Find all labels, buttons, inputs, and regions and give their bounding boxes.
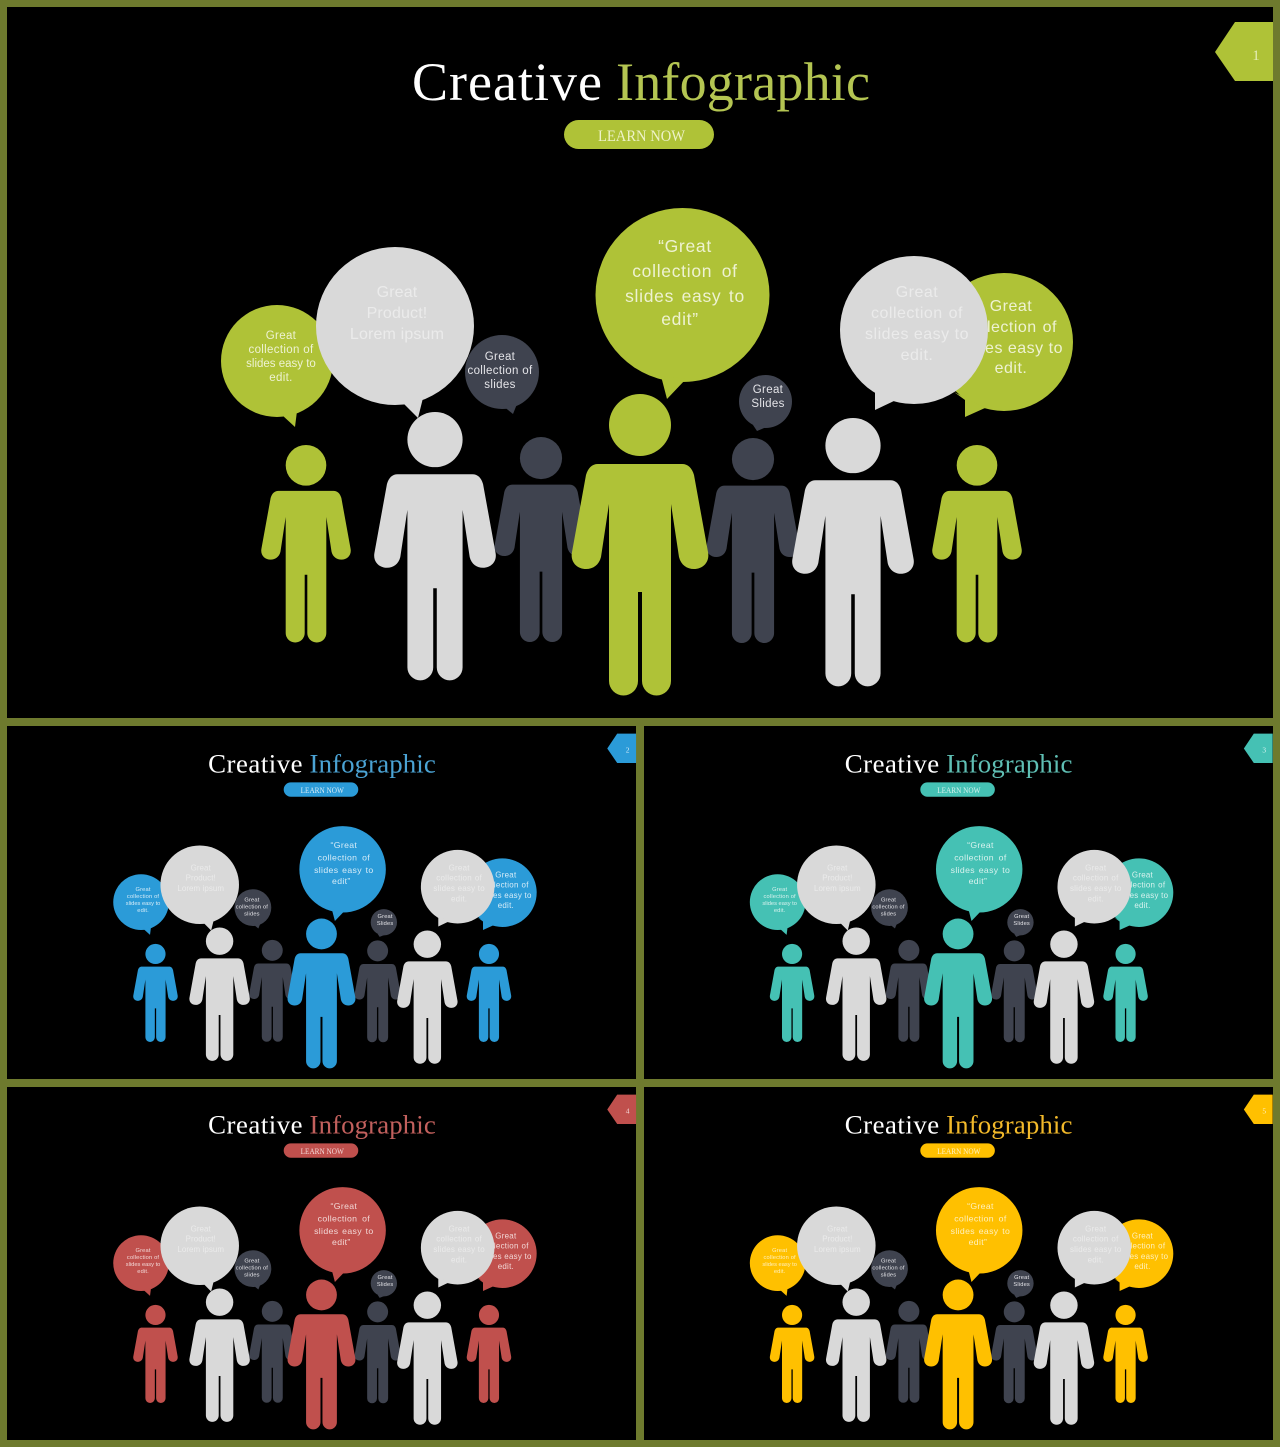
panel: blue slide	[7, 726, 636, 1079]
speech bubble: white left: Lorem ipsum	[177, 1245, 224, 1254]
speech bubble: blue right: slides easy to	[480, 891, 532, 900]
speech bubble: teal left: edit.	[774, 908, 786, 914]
button: learn now	[564, 120, 714, 149]
page tag 1	[1215, 22, 1273, 81]
person: white right	[397, 930, 458, 1064]
speech bubble: green left: edit.	[269, 372, 293, 384]
title: Infographic	[310, 748, 436, 778]
speech bubble: yellow right	[1105, 1219, 1173, 1291]
speech bubble: green left: Great	[266, 330, 297, 342]
speech bubble: white right: collection of	[436, 1235, 483, 1244]
speech bubble: green right: Great	[990, 298, 1032, 315]
speech bubble: dark left	[871, 1250, 908, 1289]
speech bubble: red right: Great	[495, 1231, 517, 1240]
speech bubble: dark left: collection of	[872, 1266, 905, 1272]
speech bubble: green right: edit.	[995, 360, 1027, 377]
speech bubble: dark small: Great	[1014, 914, 1029, 920]
speech bubble: dark small	[739, 375, 792, 431]
speech bubble: yellow centre	[936, 1187, 1022, 1282]
page tag 3	[1244, 734, 1273, 763]
speech bubble: white right: slides easy to	[1070, 884, 1122, 893]
speech bubble: white left	[160, 845, 239, 930]
panel: yellow slide	[644, 1087, 1273, 1440]
speech bubble: blue right: edit.	[498, 901, 514, 910]
speech bubble: dark left: Great	[881, 898, 896, 904]
page tag 2: 2	[626, 746, 630, 755]
speech bubble: teal right	[1105, 858, 1173, 930]
person: small green right	[932, 445, 1022, 642]
person: dark left	[249, 940, 295, 1042]
speech bubble: white left	[160, 1206, 239, 1291]
button: learn now: LEARN NOW	[598, 128, 686, 145]
speech bubble: yellow right: Great	[1132, 1231, 1154, 1240]
speech bubble: dark small	[1007, 909, 1034, 937]
speech bubble: dark small: Great	[378, 1275, 393, 1281]
speech bubble: white right: collection of	[436, 874, 483, 883]
speech bubble: blue left: edit.	[137, 908, 149, 914]
speech bubble: teal right: slides easy to	[1117, 891, 1169, 900]
speech bubble: white right	[1057, 1211, 1131, 1287]
speech bubble: dark small: Slides	[1013, 921, 1030, 927]
person: white left	[374, 412, 496, 680]
person: small teal right	[1103, 944, 1148, 1042]
person: small teal left	[770, 944, 814, 1042]
speech bubble: red centre: “Great	[330, 1201, 357, 1211]
person: small blue left	[133, 944, 178, 1042]
title	[412, 52, 870, 112]
speech bubble: yellow centre: collection of	[954, 1213, 1007, 1223]
speech bubble: dark small	[1007, 1270, 1034, 1298]
speech bubble: dark small: Great	[753, 384, 784, 396]
speech bubble: white right	[421, 1211, 494, 1287]
speech bubble: white right: edit.	[901, 347, 933, 364]
speech bubble: white left: Great	[191, 863, 212, 872]
speech bubble: white left: Great	[827, 1224, 848, 1233]
speech bubble: green centre: “Great	[658, 236, 712, 256]
speech bubble: dark left: slides	[244, 912, 260, 918]
speech bubble: white right: Great	[1085, 863, 1107, 872]
title: Creative	[845, 748, 939, 778]
person: small red right	[467, 1305, 511, 1403]
speech bubble: white left	[316, 247, 474, 418]
person: small red left	[133, 1305, 178, 1403]
speech bubble: blue left: collection of	[127, 894, 159, 900]
speech bubble: blue centre: slides easy to	[314, 865, 374, 875]
speech bubble: dark left: collection of	[467, 365, 533, 377]
title	[845, 748, 1072, 778]
speech bubble: blue centre: “Great	[330, 840, 357, 850]
person: white left	[826, 927, 886, 1061]
speech bubble: white right: slides easy to	[433, 1245, 485, 1254]
person: dark right	[707, 438, 799, 643]
speech bubble: white left: Great	[827, 863, 848, 872]
speech bubble: white left: Lorem ipsum	[350, 326, 444, 343]
person: dark right	[355, 940, 401, 1042]
speech bubble: white right: edit.	[451, 1256, 467, 1265]
speech bubble: white left: Product!	[186, 1235, 216, 1244]
speech bubble: white right: slides easy to	[1070, 1245, 1122, 1254]
speech bubble: green centre	[596, 208, 770, 399]
person: small yellow right	[1103, 1305, 1148, 1403]
speech bubble: green left: collection of	[248, 344, 314, 356]
speech bubble: yellow centre: “Great	[967, 1201, 994, 1211]
speech bubble: dark left: Great	[485, 351, 516, 363]
speech bubble: red left	[113, 1235, 169, 1296]
speech bubble: red centre: slides easy to	[314, 1226, 374, 1236]
person: white left	[189, 927, 250, 1061]
speech bubble: red right: edit.	[498, 1262, 514, 1271]
speech bubble: dark left	[235, 889, 271, 928]
page tag 5: 5	[1262, 1107, 1266, 1116]
speech bubble: red right: slides easy to	[480, 1252, 532, 1261]
speech bubble: teal right: edit.	[1134, 901, 1151, 910]
speech bubble: white right: collection of	[1073, 1235, 1119, 1244]
speech bubble: blue centre: collection of	[318, 852, 370, 862]
title: Creative	[412, 52, 602, 112]
speech bubble: teal right: Great	[1132, 870, 1154, 879]
speech bubble: dark left	[871, 889, 908, 928]
speech bubble: blue left: Great	[136, 887, 151, 893]
title	[208, 1109, 436, 1139]
speech bubble: green centre: slides easy to	[625, 286, 745, 306]
speech bubble: white right: slides easy to	[433, 884, 485, 893]
person: small green left	[261, 445, 351, 642]
speech bubble: dark left: slides	[244, 1273, 260, 1279]
speech bubble: white right: Great	[449, 1224, 470, 1233]
title: Infographic	[946, 748, 1072, 778]
speech bubble: blue centre	[299, 826, 386, 921]
person: dark right	[991, 940, 1037, 1042]
person: dark left	[249, 1301, 295, 1403]
button: learn now	[284, 782, 358, 797]
speech bubble: dark small	[371, 909, 397, 937]
button: learn now: LEARN NOW	[937, 786, 981, 795]
speech bubble: red left: edit.	[137, 1269, 149, 1275]
speech bubble: green left: slides easy to	[246, 358, 316, 370]
title: Creative	[208, 748, 303, 778]
speech bubble: blue right: Great	[495, 870, 517, 879]
speech bubble: dark left: collection of	[872, 905, 905, 911]
speech bubble: yellow left: slides easy to	[762, 1262, 797, 1268]
speech bubble: red left: collection of	[127, 1255, 159, 1261]
page tag 2	[607, 734, 636, 763]
speech bubble: white right: Great	[1085, 1224, 1107, 1233]
person: dark left	[495, 437, 587, 642]
speech bubble: white right: collection of	[871, 305, 963, 322]
title	[845, 1109, 1072, 1139]
speech bubble: white left	[797, 845, 876, 930]
speech bubble: dark small: Slides	[377, 921, 393, 927]
person: white right	[1034, 930, 1094, 1064]
person: large yellow centre	[924, 1280, 992, 1429]
speech bubble: teal right: collection of	[1120, 881, 1166, 890]
speech bubble: teal centre: collection of	[954, 852, 1007, 862]
page tag 4: 4	[626, 1107, 630, 1116]
button: learn now: LEARN NOW	[937, 1147, 981, 1156]
speech bubble: dark left: Great	[244, 898, 260, 904]
button: learn now: LEARN NOW	[301, 786, 344, 795]
speech bubble: green right: collection of	[965, 319, 1057, 336]
speech bubble: blue left	[113, 874, 169, 935]
speech bubble: dark left: Great	[244, 1259, 260, 1265]
speech bubble: green right	[935, 273, 1073, 417]
speech bubble: red centre: edit”	[332, 1237, 351, 1247]
button: learn now: LEARN NOW	[301, 1147, 344, 1156]
person: large blue centre	[288, 919, 355, 1068]
page tag 5	[1244, 1095, 1273, 1124]
panel: main green slide	[7, 7, 1273, 718]
speech bubble: white left: Product!	[822, 874, 852, 883]
speech bubble: teal left: slides easy to	[762, 901, 797, 907]
speech bubble: red centre: collection of	[318, 1213, 370, 1223]
speech bubble: white left: Product!	[186, 874, 216, 883]
speech bubble: white left	[797, 1206, 876, 1291]
speech bubble: red centre	[299, 1187, 386, 1282]
speech bubble: dark small: Slides	[751, 398, 785, 410]
speech bubble: white left: Great	[191, 1224, 212, 1233]
speech bubble: yellow centre: edit”	[969, 1237, 987, 1247]
speech bubble: green right: slides easy to	[959, 340, 1063, 357]
speech bubble: yellow right: collection of	[1120, 1242, 1166, 1251]
page tag 4	[607, 1095, 636, 1124]
person: small blue right	[467, 944, 511, 1042]
speech bubble: white left: Great	[377, 284, 418, 301]
person: small yellow left	[770, 1305, 814, 1403]
speech bubble: white right	[1057, 850, 1131, 926]
person: dark right	[991, 1301, 1037, 1403]
speech bubble: blue right	[468, 858, 537, 930]
speech bubble: white right: edit.	[1088, 1256, 1104, 1265]
speech bubble: white right	[840, 256, 988, 410]
speech bubble: blue left: slides easy to	[126, 901, 160, 907]
title: Infographic	[310, 1109, 436, 1139]
page tag 3: 3	[1262, 746, 1266, 755]
button: learn now	[284, 1143, 358, 1158]
title: Creative	[845, 1109, 939, 1139]
speech bubble: white right: collection of	[1073, 874, 1119, 883]
speech bubble: dark left	[235, 1250, 271, 1289]
speech bubble: green centre: edit”	[661, 309, 699, 329]
speech bubble: yellow right: edit.	[1134, 1262, 1151, 1271]
speech bubble: white left: Lorem ipsum	[177, 884, 224, 893]
person: large teal centre	[924, 919, 992, 1068]
person: white right	[397, 1291, 458, 1425]
person: white left	[189, 1288, 250, 1422]
speech bubble: yellow left	[750, 1235, 806, 1296]
speech bubble: dark small: Great	[1014, 1275, 1029, 1281]
person: dark left	[886, 1301, 932, 1403]
speech bubble: dark left: slides	[881, 912, 896, 918]
speech bubble: dark small: Slides	[1013, 1282, 1030, 1288]
speech bubble: white left: Product!	[367, 305, 427, 322]
speech bubble: white right	[421, 850, 494, 926]
person: white right	[792, 418, 914, 686]
speech bubble: yellow centre: slides easy to	[951, 1226, 1010, 1236]
page tag 1: 1	[1252, 48, 1260, 64]
speech bubble: yellow left: edit.	[774, 1269, 786, 1275]
speech bubble: dark small	[371, 1270, 397, 1298]
speech bubble: teal left: Great	[772, 887, 787, 893]
speech bubble: yellow left: Great	[772, 1248, 787, 1254]
speech bubble: teal centre: edit”	[969, 876, 987, 886]
speech bubble: dark left	[465, 335, 539, 414]
person: large red centre	[288, 1280, 355, 1429]
speech bubble: dark small: Great	[378, 914, 393, 920]
speech bubble: blue right: collection of	[483, 881, 529, 890]
person: dark left	[886, 940, 932, 1042]
speech bubble: dark left: collection of	[236, 1266, 268, 1272]
speech bubble: dark left: slides	[881, 1273, 896, 1279]
speech bubble: teal left	[750, 874, 806, 935]
person: white right	[1034, 1291, 1094, 1425]
title	[208, 748, 436, 778]
speech bubble: red left: Great	[136, 1248, 151, 1254]
speech bubble: red left: slides easy to	[126, 1262, 160, 1268]
speech bubble: green centre: collection of	[632, 261, 738, 281]
speech bubble: dark left: slides	[484, 379, 516, 391]
speech bubble: yellow left: collection of	[764, 1255, 796, 1261]
speech bubble: green left	[221, 305, 333, 427]
person: white left	[826, 1288, 886, 1422]
speech bubble: white left: Lorem ipsum	[814, 884, 861, 893]
speech bubble: red right: collection of	[483, 1242, 529, 1251]
speech bubble: dark left: collection of	[236, 905, 268, 911]
speech bubble: white right: Great	[896, 284, 938, 301]
title: Infographic	[616, 52, 870, 112]
speech bubble: blue centre: edit”	[332, 876, 351, 886]
speech bubble: white right: slides easy to	[865, 326, 969, 343]
speech bubble: dark small: Slides	[377, 1282, 393, 1288]
speech bubble: teal centre	[936, 826, 1022, 921]
speech bubble: white right: edit.	[451, 895, 467, 904]
speech bubble: teal centre: “Great	[967, 840, 994, 850]
speech bubble: white right: Great	[449, 863, 470, 872]
panel: teal slide	[644, 726, 1273, 1079]
person: dark right	[355, 1301, 401, 1403]
title: Infographic	[946, 1109, 1072, 1139]
button: learn now	[920, 782, 995, 797]
speech bubble: dark left: Great	[881, 1259, 896, 1265]
title: Creative	[208, 1109, 303, 1139]
speech bubble: red right	[468, 1219, 537, 1291]
panel: red slide	[7, 1087, 636, 1440]
speech bubble: teal centre: slides easy to	[951, 865, 1010, 875]
speech bubble: yellow right: slides easy to	[1117, 1252, 1169, 1261]
button: learn now	[920, 1143, 995, 1158]
speech bubble: teal left: collection of	[764, 894, 796, 900]
speech bubble: white right: edit.	[1088, 895, 1104, 904]
person: large green centre	[572, 394, 708, 696]
speech bubble: white left: Product!	[822, 1235, 852, 1244]
speech bubble: white left: Lorem ipsum	[814, 1245, 861, 1254]
